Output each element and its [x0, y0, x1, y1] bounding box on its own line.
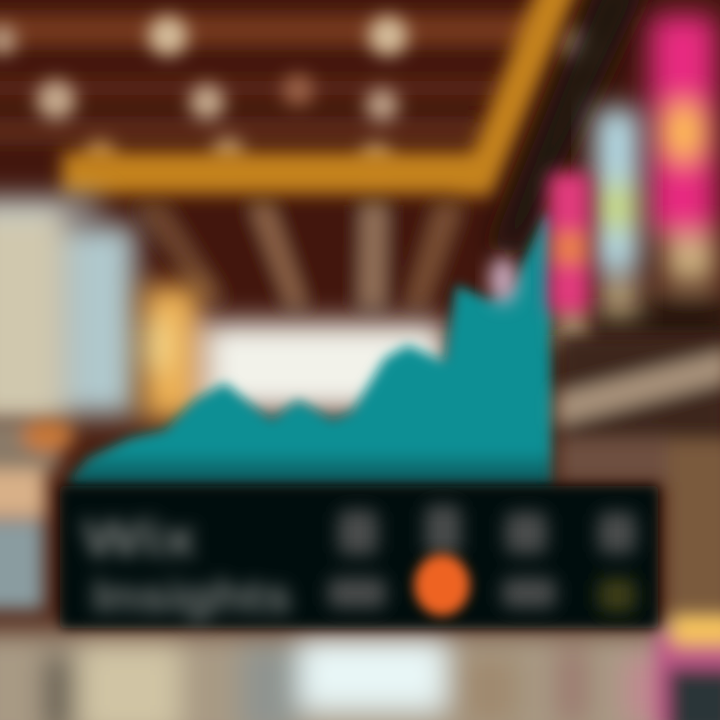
orange circle marker [414, 554, 470, 616]
backdrop behind chart [140, 285, 445, 420]
right banners [548, 15, 720, 348]
banner: small pink [548, 172, 590, 348]
right lower beams [556, 335, 720, 640]
teal area chart [70, 215, 553, 488]
left shop items [0, 420, 74, 610]
pale smudge near chart top [489, 256, 517, 304]
orange ceiling beam [62, 0, 582, 196]
left building [0, 198, 136, 425]
panel title text: Insights [92, 570, 292, 622]
ceiling background [0, 0, 720, 330]
ceiling lights [0, 16, 595, 174]
floor [0, 630, 720, 720]
panel title text [82, 510, 292, 622]
banner: light blue [594, 108, 640, 318]
banner: large pink [590, 15, 720, 342]
dark diagonal beam [490, 0, 650, 250]
dark stats panel [60, 486, 658, 628]
panel stats [328, 505, 636, 612]
panel title text: Wix [82, 510, 197, 568]
corner pink and yellow display [655, 615, 720, 720]
